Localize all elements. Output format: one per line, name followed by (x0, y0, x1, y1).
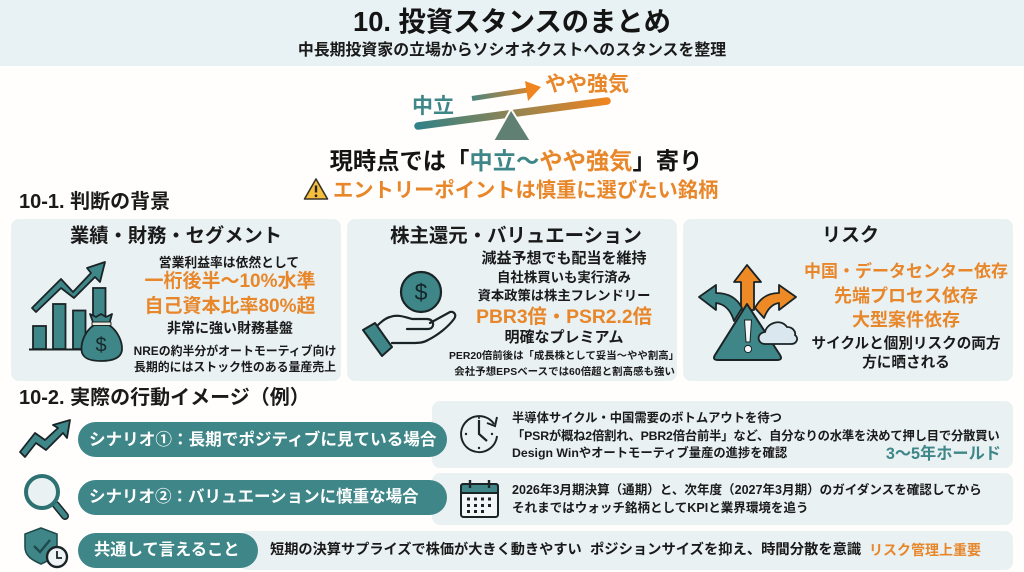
scenario 2 label: シナリオ②：バリュエーションに慎重な場合 (89, 488, 419, 506)
risk: advanced process: 先端プロセス依存 (834, 286, 978, 306)
common point: position sizing: ポジションサイズを抑え、時間分散を意識 (590, 542, 861, 558)
equity ratio value: 自己資本比率80%超 (144, 296, 316, 317)
label: slightly bullish: やや強気 (545, 73, 629, 96)
icon: clock (460, 415, 498, 454)
icon: rising arrow (19, 419, 71, 458)
panel: performance and finance (11, 219, 341, 381)
pill: common points (78, 533, 258, 568)
heading: 10-1: 10-1. 判断の背景 (19, 191, 170, 213)
panel: risk (683, 219, 1013, 381)
clear premium: 明確なプレミアム (505, 329, 623, 346)
holding period: 3〜5年ホールド (886, 445, 1001, 463)
scenario 1 text: Design Winやオートモーティブ量産の進捗を確認 (512, 446, 787, 460)
icon: triangle warning with arrows and cloud (698, 264, 798, 361)
panel heading: リスク (822, 225, 879, 246)
header band (0, 0, 1024, 66)
scenario 2 text (512, 482, 982, 514)
risk summary: サイクルと個別リスクの両方 (812, 336, 1000, 352)
panel: common points (240, 531, 1013, 570)
capital policy: 資本政策は株主フレンドリー (478, 288, 650, 303)
operating margin label: 営業利益率は依然として (159, 255, 299, 270)
icon: hand holding coin (362, 270, 456, 357)
risk summary: 方に晒される (862, 355, 950, 371)
scenario 1 text: 半導体サイクル・中国需要のボトムアウトを待つ (512, 411, 782, 425)
icon: magnifier (24, 474, 69, 520)
panel heading: 株主還元・バリュエーション (390, 225, 642, 247)
risk: large projects: 大型案件依存 (852, 310, 960, 330)
PBR and PSR values: PBR3倍・PSR2.2倍 (476, 307, 652, 328)
panel: scenario 2 detail (432, 473, 1013, 525)
NRE note: 長期的にはストック性のある量産売上 (134, 360, 336, 374)
icon: calendar (460, 480, 499, 518)
pill: scenario 2 (78, 480, 447, 514)
scenario 2 text: それまではウォッチ銘柄としてKPIと業界環境を追う (512, 500, 809, 514)
operating margin value: 一桁後半〜10%水準 (144, 271, 316, 292)
panel: shareholder returns and valuation (347, 219, 677, 381)
common point: short-term volatility: 短期の決算サプライズで株価が大きく動きやすい (270, 542, 582, 558)
pill: scenario 1 (78, 422, 447, 456)
scenario 1 label: シナリオ①：長期でポジティブに見ている場合 (89, 430, 436, 448)
subtitle: 中長期投資家の立場からソシオネクストへのスタンスを整理 (298, 42, 726, 59)
scenario 1 text (512, 411, 1000, 460)
strong financial base: 非常に強い財務基盤 (167, 320, 293, 336)
risk: China and data centers: 中国・データセンター依存 (804, 262, 1008, 281)
entry point caution: エントリーポイントは慎重に選びたい銘柄 (333, 180, 718, 202)
PER note: 会社予想EPSベースでは60倍超と割高感も強い (454, 367, 675, 378)
PER note: PER20倍前後は「成長株として妥当〜やや割高」 (449, 351, 679, 362)
title: 10. 投資スタンスのまとめ (353, 6, 671, 37)
heading: 10-2: 10-2. 実際の行動イメージ（例） (19, 387, 310, 409)
PER note (449, 350, 679, 378)
icon: warning (304, 178, 328, 200)
panel: scenario 1 detail (432, 401, 1013, 468)
common points label: 共通して言えること (94, 541, 240, 559)
label: neutral: 中立 (412, 95, 454, 118)
NRE note (134, 344, 336, 374)
icon: bar chart, arrow and money bag: $ (95, 334, 107, 356)
stance balance graphic (414, 81, 611, 140)
common point: risk management: リスク管理上重要 (869, 542, 981, 558)
scenario 2 text: 2026年3月期決算（通期）と、次年度（2027年3月期）のガイダンスを確認してから (512, 483, 982, 497)
dividend maintained: 減益予想でも配当を維持 (481, 250, 646, 267)
icon: hand holding coin: $ (415, 279, 428, 305)
buyback: 自社株買いも実行済み (497, 270, 631, 285)
panel heading: 業績・財務・セグメント (70, 226, 282, 247)
risk summary (812, 335, 1000, 371)
NRE note: NREの約半分がオートモーティブ向け (134, 344, 336, 358)
icon: shield and clock (24, 527, 68, 568)
icon: bar chart, arrow and money bag (29, 261, 123, 362)
stance statement: 現時点では「中立〜やや強気」寄り (330, 148, 702, 174)
scenario 1 text: 「PSRが概ね2倍割れ、PBR2倍台前半」など、自分なりの水準を決めて押し目で分散買い (512, 428, 1000, 442)
